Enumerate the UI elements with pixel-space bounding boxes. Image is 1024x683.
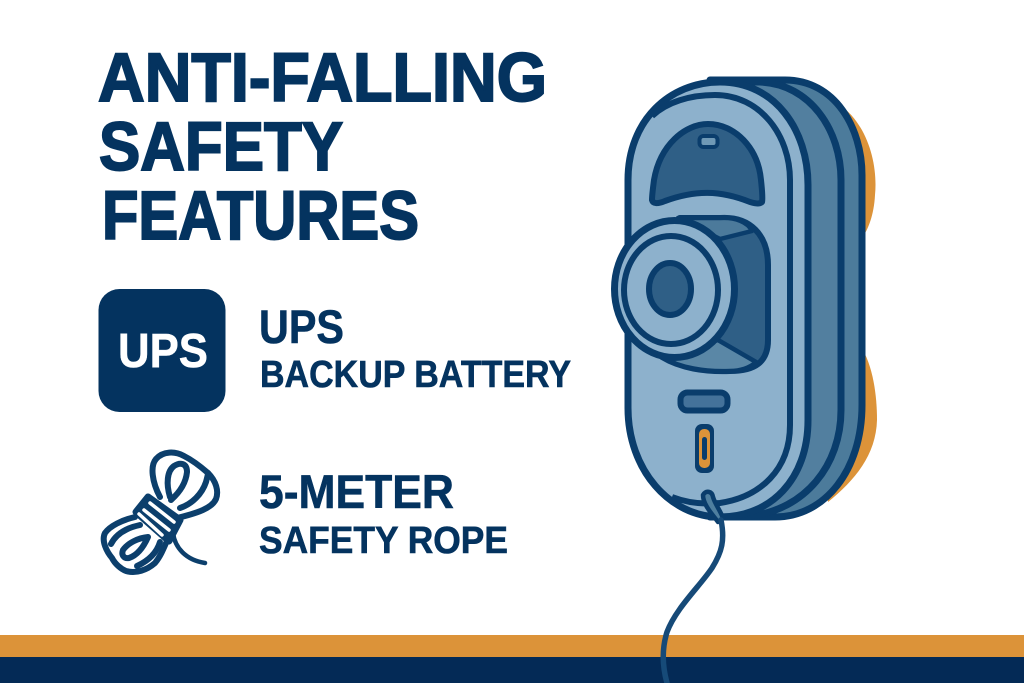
feature label: UPS backup battery: BACKUP BATTERY [260, 354, 571, 396]
title [98, 39, 547, 254]
upper dome panel [652, 124, 762, 204]
title: SAFETY [99, 108, 343, 185]
suction pad top [840, 105, 876, 238]
middle body layer [710, 82, 841, 516]
footer band [0, 635, 1024, 683]
camera housing [662, 218, 768, 371]
feature label: UPS backup battery: UPS [259, 300, 344, 353]
front shell [628, 82, 808, 517]
icon: UPS badge [98, 289, 226, 412]
title: FEATURES [102, 177, 419, 254]
feature label: 5-meter safety rope: 5-METER [259, 465, 454, 518]
safety rope cable [663, 520, 723, 683]
housing upper facet [678, 218, 752, 239]
barrel inner ring [624, 236, 718, 344]
rear body layer [710, 80, 862, 517]
indicator slot top [700, 136, 718, 147]
rope attachment [703, 492, 723, 522]
barrel centre [649, 263, 691, 315]
icon: coiled rope [104, 453, 217, 572]
status light [695, 424, 714, 473]
barrel outer ring [614, 220, 734, 358]
illustration: window cleaning robot [614, 80, 877, 683]
button [680, 392, 728, 410]
feature label: 5-meter safety rope: SAFETY ROPE [259, 520, 508, 562]
icon: UPS badge: UPS [118, 325, 208, 378]
inner plate line [652, 95, 790, 504]
housing lower facet [662, 340, 756, 371]
suction pad bottom [820, 345, 877, 502]
title: ANTI-FALLING [98, 39, 547, 116]
feature label: 5-meter safety rope [259, 465, 508, 562]
feature label: UPS backup battery [259, 300, 571, 396]
